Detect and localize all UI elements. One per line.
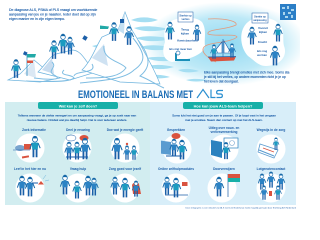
left intro: Telkens wanneer de ziekte verergert en om aanpassing vraagt, ga je op zoek naar een [18, 114, 137, 118]
right labels [158, 126, 286, 171]
QR code [280, 4, 296, 20]
left thought bubble: verlies: kijken [181, 32, 189, 36]
mountain 2 [38, 50, 96, 80]
left thought bubble: verlies: verlies [182, 18, 190, 21]
left labels: Zoek informatie [22, 128, 46, 132]
intro text [9, 8, 97, 21]
paths [26, 38, 164, 88]
climbers top [110, 22, 119, 41]
right thought bubble: aanpassing: Kracht [258, 40, 267, 44]
left thought bubble: verlies [163, 12, 205, 62]
left labels: Vraag hulp [70, 167, 86, 171]
left circles [16, 134, 140, 202]
left figures [13, 135, 141, 198]
right thought bubble: aanpassing: Iets nog [257, 49, 268, 53]
intro text: De diagnose ALS, PSMA of PLS vraagt om voortdurende [9, 8, 97, 12]
right labels: Online zelfhulpmodules [158, 167, 194, 171]
heading pill right [183, 102, 263, 109]
left thought bubble: verlies: Iets niet meer kun [169, 47, 192, 51]
right thought bubble: aanpassing [241, 13, 285, 66]
heading pill right: Hoe kan jouw ALS-team helpen? [194, 104, 253, 108]
intro text: eigen manier en in zijn eigen tempo. [9, 17, 65, 21]
right thought bubble: aanpassing: wel kan [256, 53, 267, 57]
right paragraph: je stil bij het verlies, op andere momenten richt je je op [203, 75, 286, 79]
panel: Wat kan je zelf doen [5, 102, 150, 205]
climbers 2 [50, 40, 59, 59]
left labels: Doe wat je energie geeft [107, 128, 144, 132]
footer credit: Deze infographic is een initiatief van ALS Centrum Nederland, mede mogelijk gemaakt door Stichting ALS Nederland [185, 206, 297, 210]
right intro: Soms lukt het niet goed om je aan te passen. Of je loopt vast in het omgaan [172, 114, 276, 118]
panel: Hoe kan jouw ALS-team helpen [150, 102, 296, 205]
title: EMOTIONEEL IN BALANS MET [78, 89, 193, 101]
heading pill left [38, 102, 118, 109]
right labels: Lotgenotencontact [257, 167, 286, 171]
right circles [162, 134, 286, 202]
left labels: Deel je ervaring [66, 128, 90, 132]
heading pill left: Wat kan je zelf doen? [59, 104, 98, 108]
left thought bubble: verlies: Sterkte op [179, 14, 192, 18]
left intro: nieuwe balans. Ontdek wat jou daarbij helpt. Dat is voor iedereen anders. [27, 118, 127, 122]
bird 3 [120, 19, 124, 23]
background glow [143, 2, 307, 86]
left labels: Leef in het hier en nu [14, 167, 46, 171]
right labels: Uitleg over rouw- en [209, 126, 239, 130]
right labels: Wegwijs in de zorg [257, 128, 285, 132]
right figures [161, 133, 285, 200]
left intro [18, 114, 137, 122]
left thought bubble: verlies: Terug [181, 28, 189, 32]
bird 2 [82, 35, 88, 41]
right intro [172, 114, 276, 122]
right paragraph: Elke aanpassing brengt emoties met zich mee. Soms sta [204, 70, 289, 74]
right thought bubble: aanpassing: Vooruit [258, 26, 268, 30]
bird 1 [23, 51, 28, 56]
right thought bubble: aanpassing: aanpassing [253, 19, 267, 22]
left labels: Zorg goed voor jezelf [109, 167, 142, 171]
flag top [100, 26, 109, 29]
mountains illustration [8, 12, 164, 88]
right labels: Gesprekken [167, 128, 185, 132]
right thought bubble: aanpassing: Sterkte op [254, 16, 266, 18]
left labels [14, 128, 144, 171]
flag 1 [27, 54, 36, 76]
climbers and flags [12, 19, 134, 78]
right thought bubble: aanpassing: kijken [259, 30, 267, 34]
left thought bubble: verlies: Kwetsbaarheid [177, 38, 198, 42]
right labels: Doorverwijzen [213, 167, 235, 171]
mountain 3 [82, 12, 160, 84]
intro text: aanpassing van jou en je naasten. Ieder doet dat op zijn [9, 12, 96, 16]
right intro: met je emoties. Neem dan contact op met het ALS-team. [185, 118, 263, 122]
shadow facets [92, 44, 108, 66]
right paragraph: het leven dat doorgaat. [204, 80, 239, 84]
mountain 1 [8, 60, 60, 82]
clouds [92, 17, 208, 82]
boat with swirls [203, 19, 237, 62]
right labels: verliesverwerking [211, 130, 238, 134]
right paragraph [203, 70, 289, 84]
